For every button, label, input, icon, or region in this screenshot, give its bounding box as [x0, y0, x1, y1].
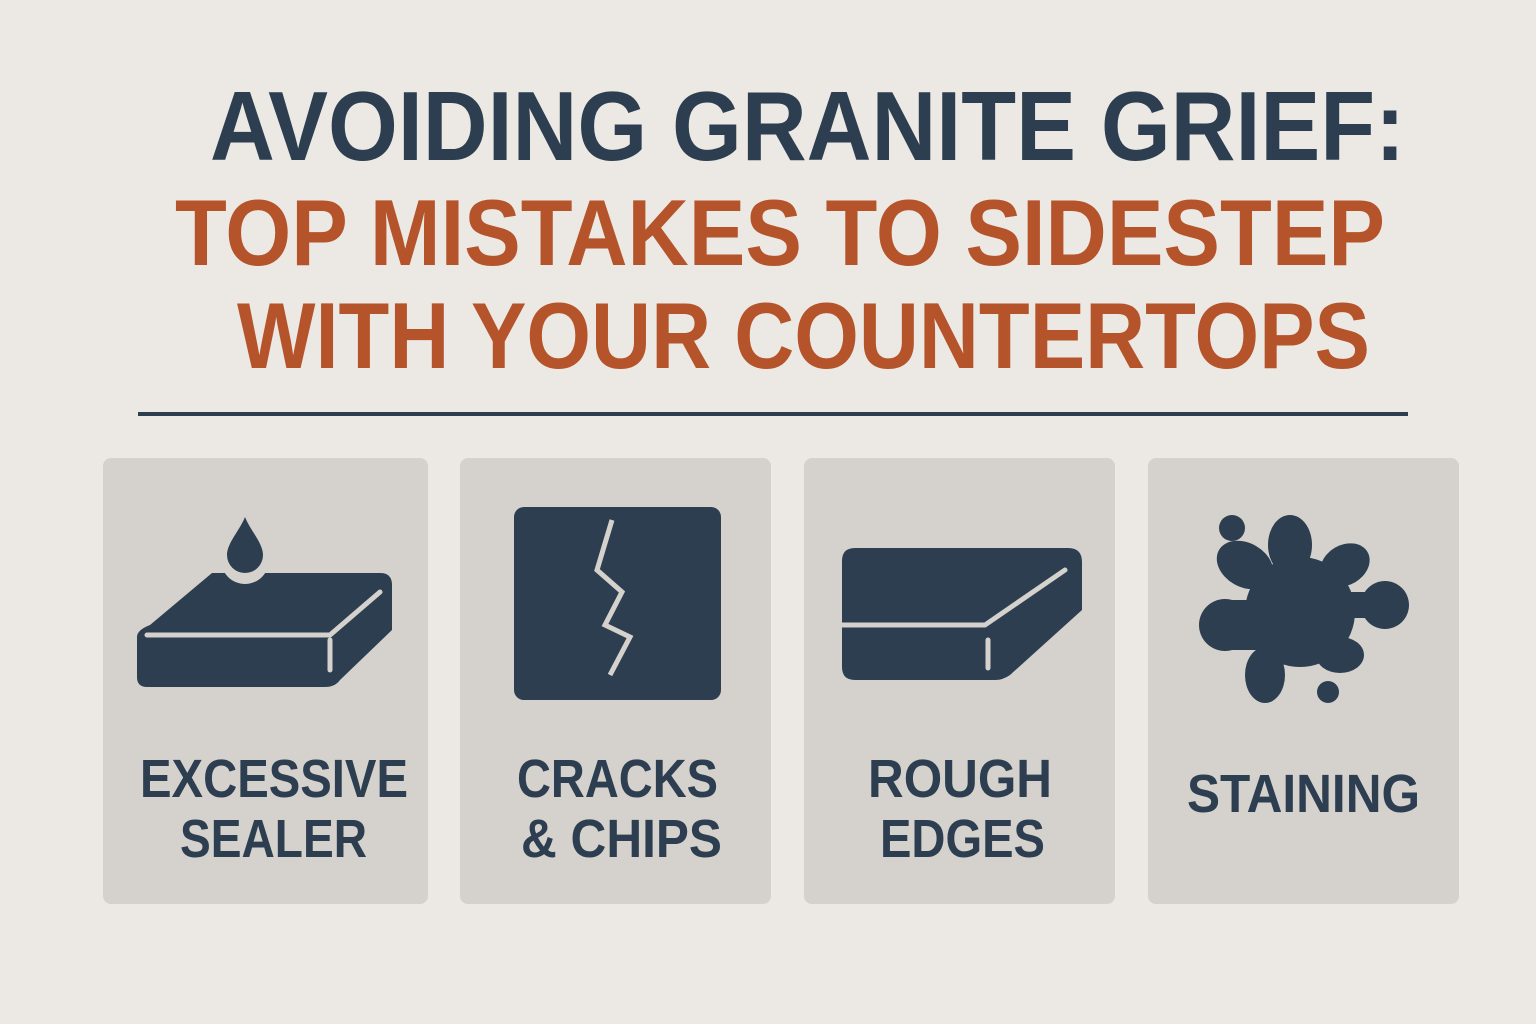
title: AVOIDING GRANITE GRIEF: [210, 71, 1405, 181]
panel: cracks & chips [460, 458, 771, 904]
icon: stain splat [1199, 515, 1409, 703]
label [517, 749, 722, 869]
label: EDGES [880, 809, 1045, 869]
label: & CHIPS [521, 809, 722, 869]
title [175, 71, 1405, 388]
label [140, 749, 408, 869]
panel: staining [1148, 458, 1459, 904]
label [868, 749, 1052, 869]
icon: slab with drop [137, 517, 392, 687]
icon: slab edge [842, 548, 1082, 680]
title: TOP MISTAKES TO SIDESTEP [175, 180, 1385, 285]
panel: rough edges [804, 458, 1115, 904]
label: EXCESSIVE [140, 749, 408, 809]
label: ROUGH [868, 749, 1052, 809]
panel: excessive sealer [103, 458, 428, 904]
label: STAINING [1187, 764, 1420, 824]
icon: cracked tile [514, 507, 721, 700]
label: CRACKS [517, 749, 718, 809]
title: WITH YOUR COUNTERTOPS [237, 283, 1370, 388]
label: SEALER [180, 809, 367, 869]
